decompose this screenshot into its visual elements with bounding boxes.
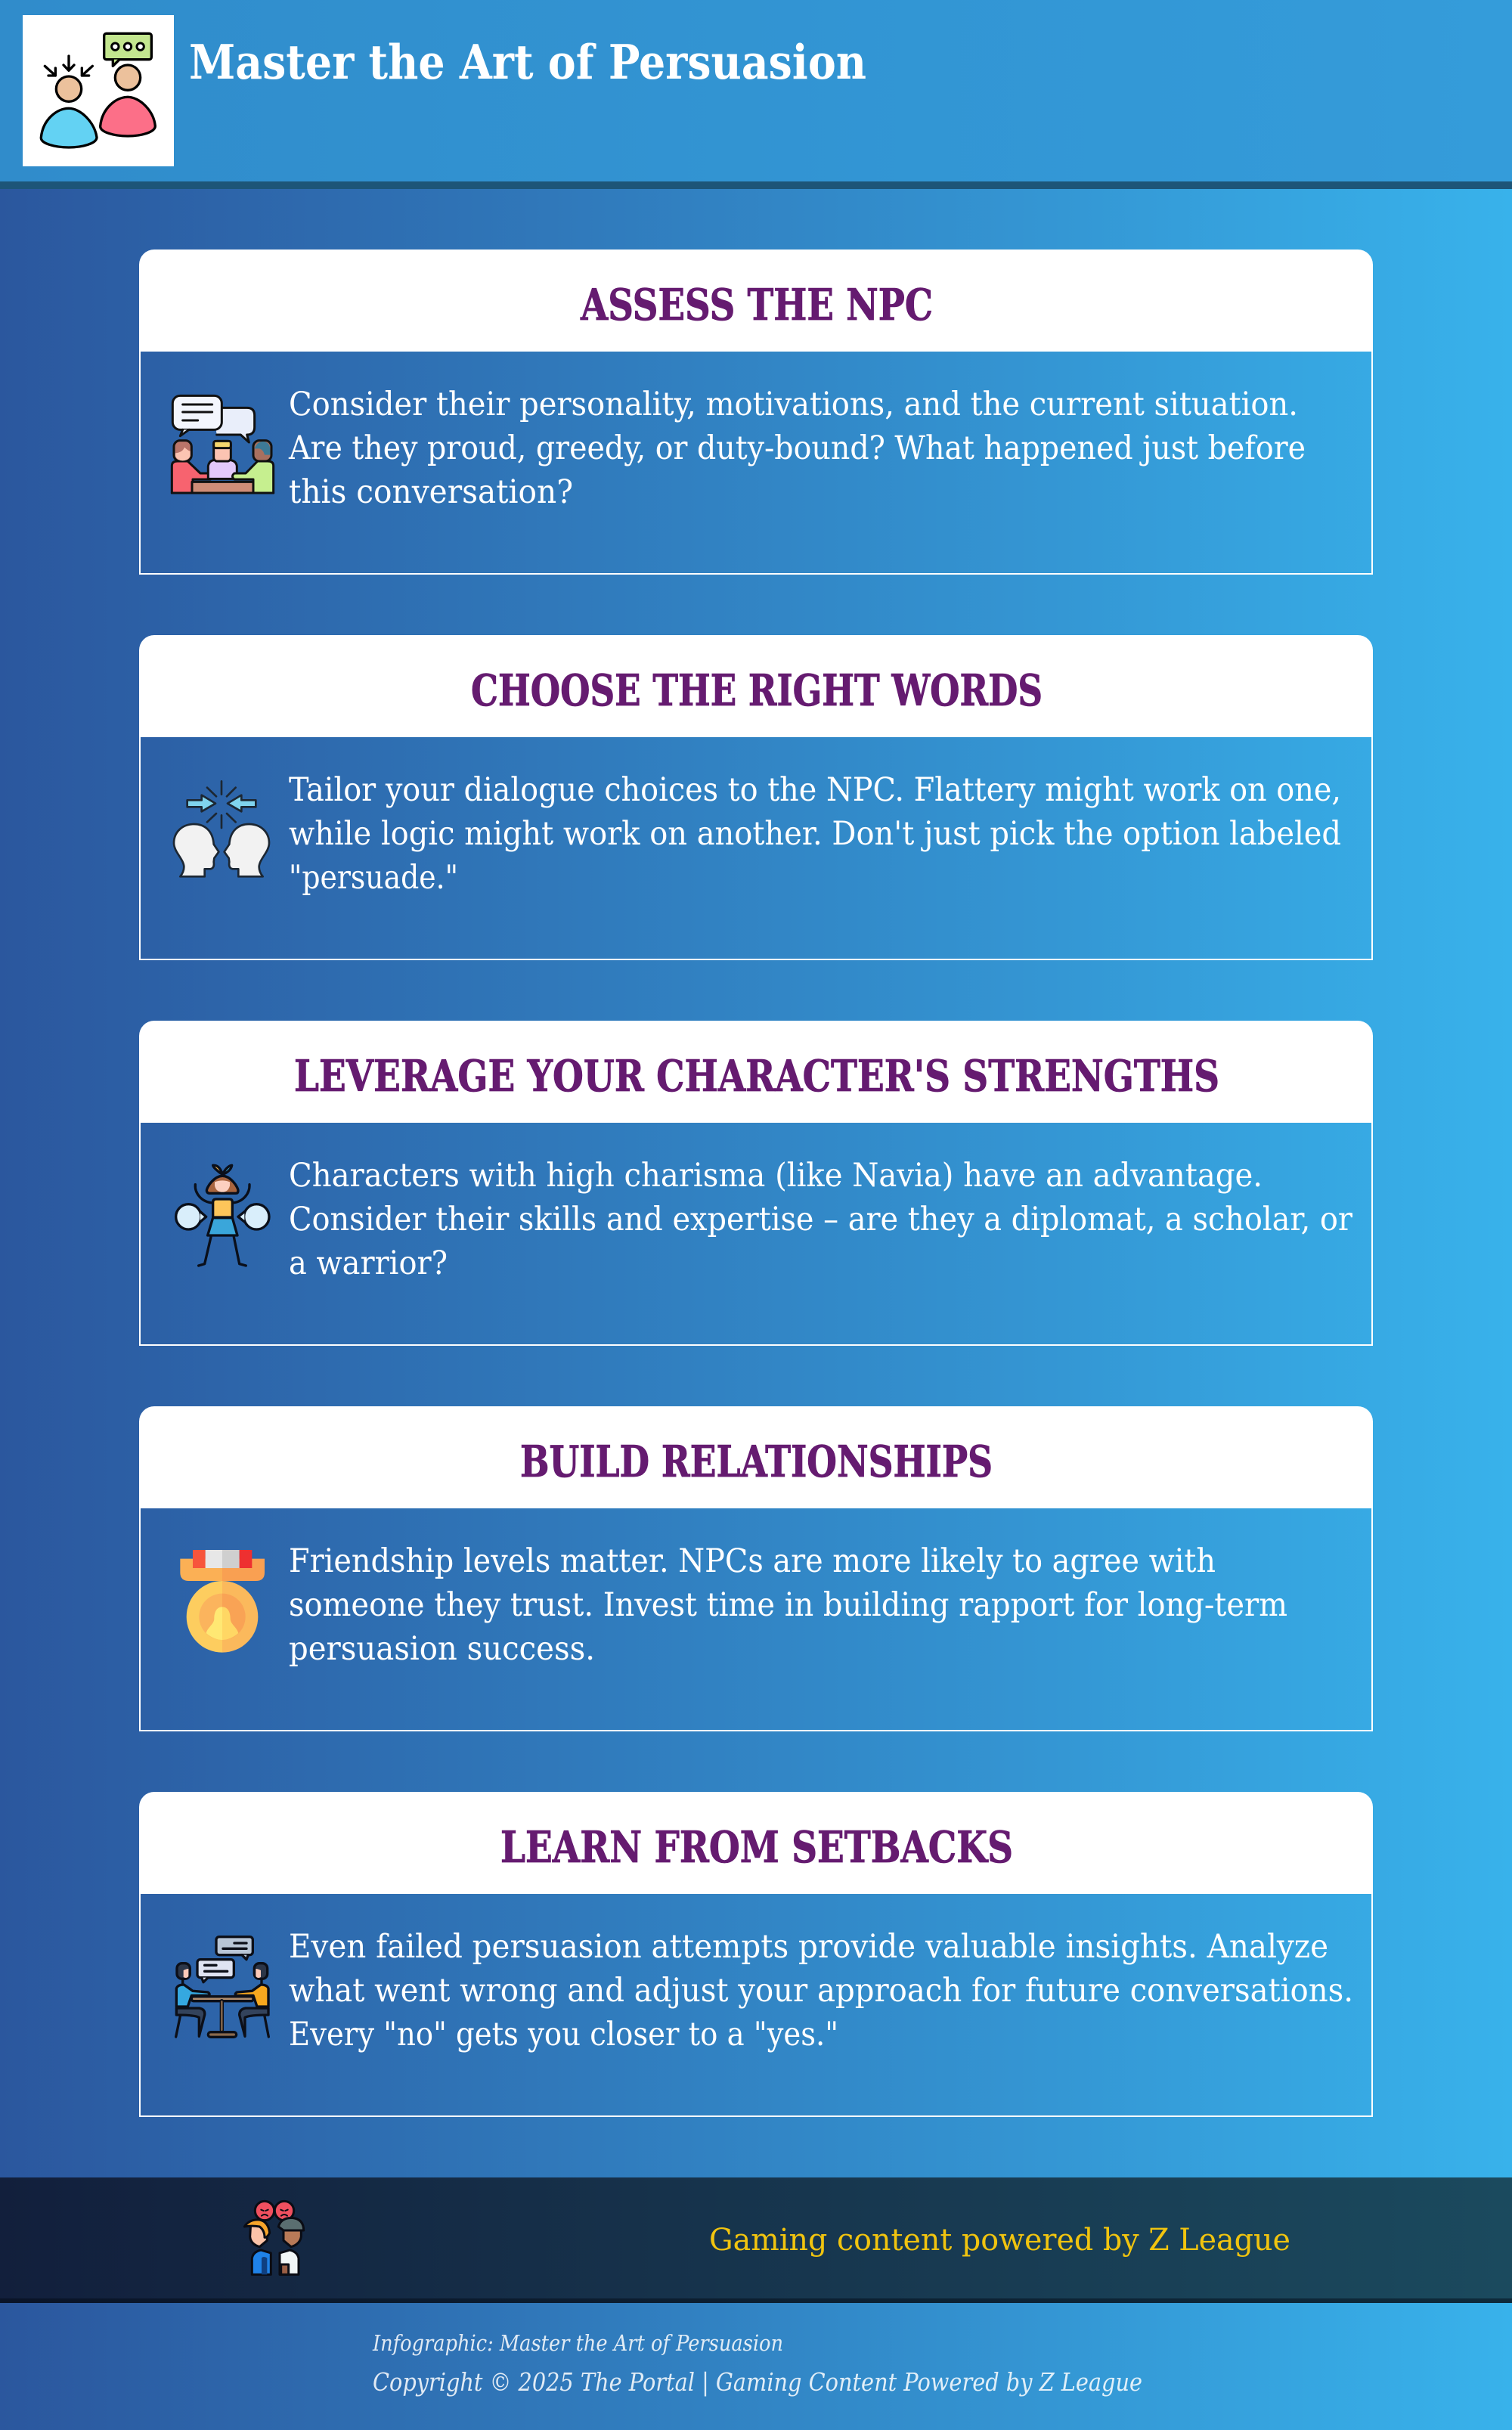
body text: someone they trust. Invest time in building rapport for long-term — [289, 1586, 1287, 1624]
body text — [288, 386, 1306, 511]
copyright: Copyright © 2025 The Portal | Gaming Content Powered by Z League — [373, 2367, 1142, 2397]
body text — [289, 771, 1341, 897]
body text: what went wrong and adjust your approach for future conversations. — [289, 1972, 1353, 2010]
body text — [289, 1542, 1287, 1668]
body text: Consider their personality, motivations, and the current situation. — [289, 386, 1298, 423]
body text: Are they proud, greedy, or duty-bound? What happened just before — [288, 429, 1306, 467]
icon: two people talking at a cafe table — [176, 1937, 268, 2037]
body text — [289, 1157, 1353, 1282]
icon: persuasion logo — [23, 15, 174, 166]
heading: LEARN FROM SETBACKS — [500, 1822, 1013, 1873]
body text: "persuade." — [289, 859, 458, 897]
panel: choose the right words — [139, 635, 1373, 959]
panel: learn from setbacks — [139, 1792, 1373, 2116]
panel: leverage your character's strengths — [139, 1021, 1373, 1345]
icon: group conversation at a table — [172, 395, 274, 493]
heading: CHOOSE THE RIGHT WORDS — [471, 665, 1043, 716]
body text: Characters with high charisma (like Navia) have an advantage. — [289, 1157, 1263, 1195]
panel: assess the NPC — [139, 250, 1373, 574]
body text: Every "no" gets you closer to a "yes." — [289, 2016, 838, 2053]
footer credits — [372, 2330, 1142, 2397]
body text: Consider their skills and expertise – are they a diplomat, a scholar, or — [289, 1201, 1353, 1238]
body text: persuasion success. — [289, 1630, 595, 1668]
body text: Friendship levels matter. NPCs are more likely to agree with — [289, 1542, 1216, 1580]
icon: cheerleader figure — [176, 1165, 269, 1266]
icon: two heads facing with arrows — [174, 781, 269, 876]
panel: build relationships — [139, 1406, 1373, 1731]
icon: gold medal — [180, 1550, 265, 1653]
icon: two people with angry faces — [244, 2201, 304, 2274]
body text: while logic might work on another. Don't just pick the option labeled — [289, 815, 1341, 853]
body text — [289, 1928, 1353, 2053]
infographic name: Infographic: Master the Art of Persuasion — [372, 2330, 783, 2356]
header banner — [0, 0, 1512, 189]
body text: this conversation? — [289, 473, 573, 511]
heading: ASSESS THE NPC — [580, 280, 933, 330]
sponsor text: Gaming content powered by Z League — [709, 2223, 1290, 2258]
sponsor band — [0, 2177, 1512, 2303]
heading: BUILD RELATIONSHIPS — [520, 1437, 993, 1487]
title: Master the Art of Persuasion — [189, 34, 866, 90]
heading: LEVERAGE YOUR CHARACTER'S STRENGTHS — [294, 1051, 1219, 1102]
body text: Tailor your dialogue choices to the NPC. Flattery might work on one, — [289, 771, 1341, 809]
body text: Even failed persuasion attempts provide valuable insights. Analyze — [289, 1928, 1328, 1966]
body text: a warrior? — [289, 1244, 448, 1282]
